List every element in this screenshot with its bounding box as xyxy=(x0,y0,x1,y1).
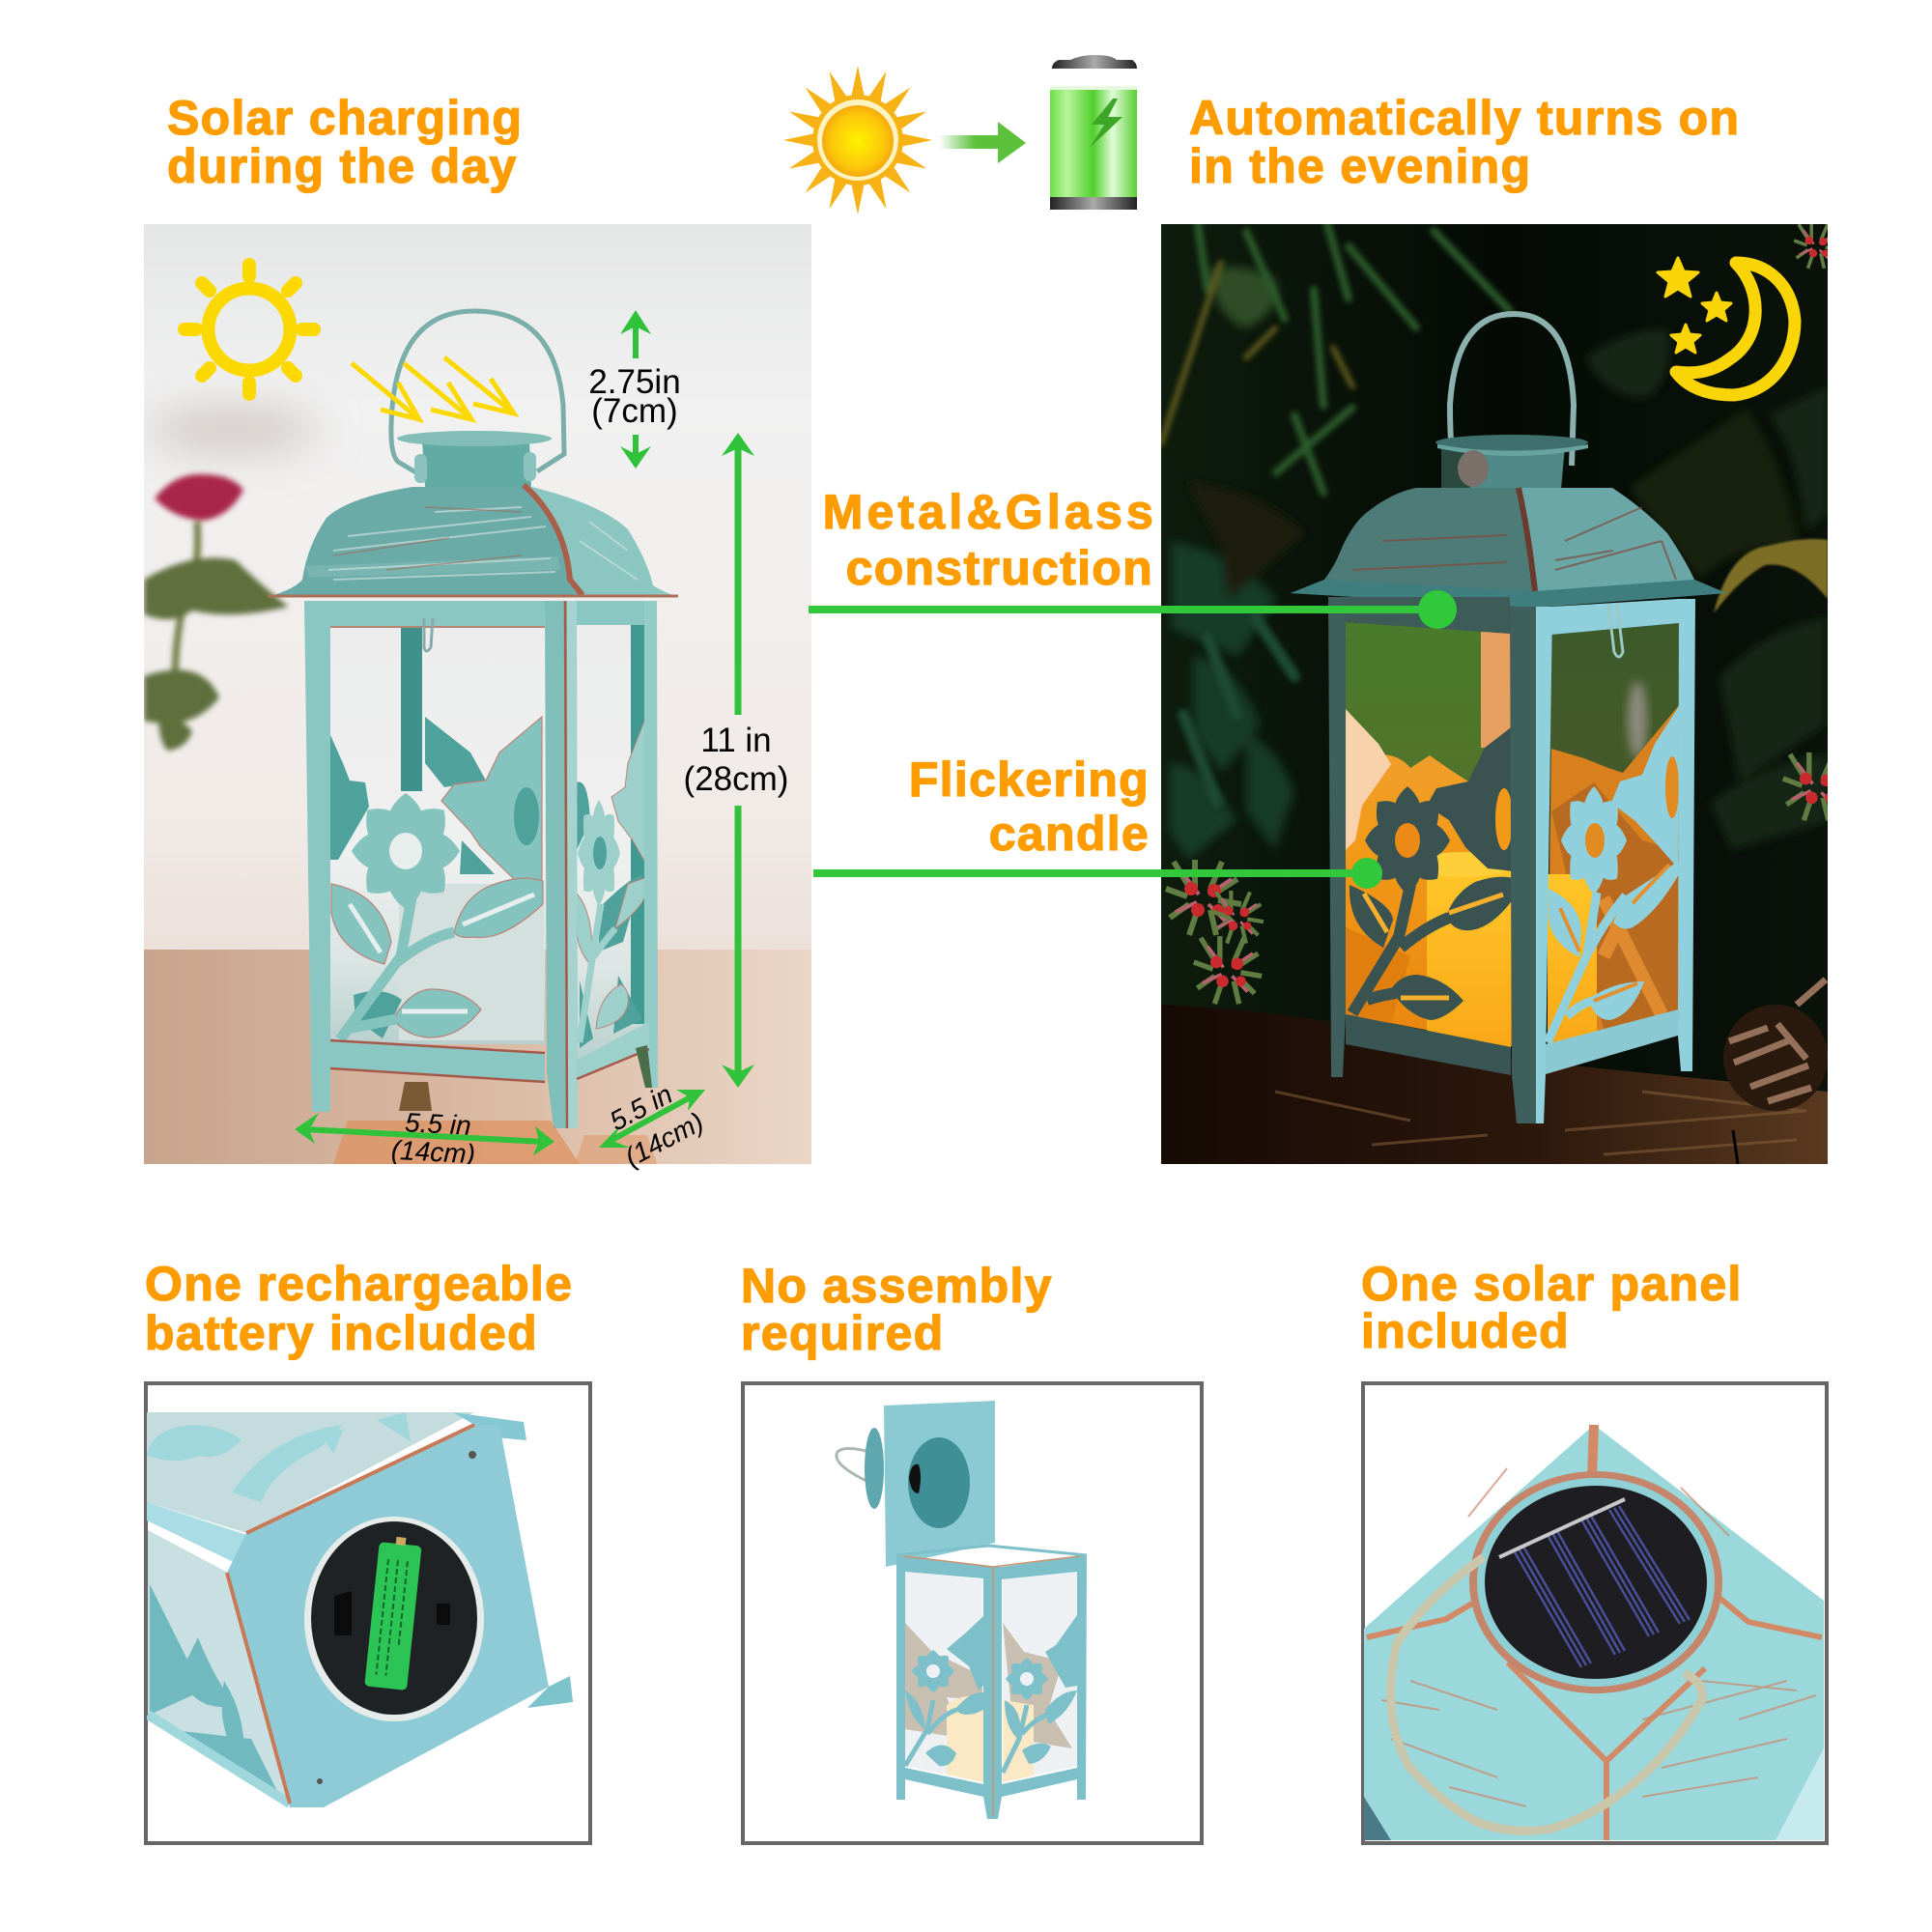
red flowers xyxy=(1166,223,1851,1004)
icon: small sun xyxy=(185,265,314,394)
heading: battery: One rechargeable xyxy=(145,1257,573,1311)
roof xyxy=(1291,488,1535,608)
handle behind lid xyxy=(837,1448,876,1481)
wood tabletop xyxy=(1161,1005,1828,1164)
wire handle xyxy=(1391,1557,1702,1831)
back bird silhouettes xyxy=(330,717,642,1048)
callout: metal and glass construction: construction xyxy=(846,541,1153,595)
dimension: width 5.5 in: (14cm) xyxy=(390,1135,476,1169)
front face decor xyxy=(331,717,543,1037)
dimension: handle height 2.75in xyxy=(588,310,681,469)
dimension: handle height 2.75in: (7cm) xyxy=(591,392,678,430)
panel: battery detail xyxy=(146,1383,590,1843)
dimension: lantern height 11 in xyxy=(684,433,788,1088)
candle xyxy=(399,884,544,1040)
back feet xyxy=(399,1082,432,1111)
battery xyxy=(364,1535,422,1690)
panel: daytime lantern photo xyxy=(144,224,811,1164)
handle xyxy=(391,311,564,474)
heading: no assembly xyxy=(741,1259,1053,1360)
solar disc xyxy=(1469,1471,1722,1693)
dimension: depth 5.5 in: 5.5 in xyxy=(605,1079,677,1136)
holder ring xyxy=(304,1517,484,1721)
rose, blurred xyxy=(144,474,289,751)
right face cutouts xyxy=(1548,706,1679,1020)
callout: metal and glass construction: Metal&Glass xyxy=(823,485,1157,539)
callout: flickering candle: candle xyxy=(989,807,1150,861)
panel: no assembly detail xyxy=(743,1383,1202,1843)
glass, front and side xyxy=(330,819,545,1044)
callout: metal and glass construction xyxy=(809,485,1457,629)
pine cone xyxy=(1723,980,1828,1111)
silhouettes xyxy=(905,1615,1077,1766)
heading: automatically turns on: Automatically turns on xyxy=(1189,91,1740,145)
orange leaf xyxy=(1714,539,1828,613)
base plate xyxy=(227,1425,549,1807)
dimension: handle height 2.75in: 2.75in xyxy=(588,363,681,401)
side face decor xyxy=(577,719,647,1029)
sun ray arrows xyxy=(352,357,514,419)
heading: battery xyxy=(145,1257,573,1360)
icon: charging battery xyxy=(1050,55,1137,210)
arrow: sun to battery xyxy=(939,122,1026,163)
neck and cap xyxy=(1441,446,1565,489)
foliage xyxy=(1169,268,1828,860)
dimension: width 5.5 in: 5.5 in xyxy=(404,1107,472,1141)
heading: no assembly: required xyxy=(741,1306,944,1360)
neck and cap xyxy=(422,440,531,487)
heading: battery: battery included xyxy=(145,1306,538,1360)
handle xyxy=(1450,314,1574,473)
latch xyxy=(424,618,433,651)
panel: night lantern photo xyxy=(1161,223,1851,1164)
panel: solar panel detail xyxy=(1363,1383,1827,1843)
icon: sun with orange rays xyxy=(783,66,932,214)
heading: solar charging during the day: during the day xyxy=(167,139,518,193)
frame bars xyxy=(304,601,658,1128)
back frame xyxy=(401,627,422,791)
heading: automatically turns on xyxy=(1189,91,1740,193)
heading: solar charging during the day: Solar charging xyxy=(167,91,523,145)
small lantern glass xyxy=(905,1572,982,1782)
lantern: night glowing xyxy=(1291,314,1726,1123)
heading: automatically turns on: in the evening xyxy=(1189,139,1531,193)
heading: no assembly: No assembly xyxy=(741,1259,1053,1313)
right window xyxy=(1548,623,1679,1044)
left window xyxy=(1346,622,1516,1047)
heading: solar charging during the day xyxy=(167,91,523,193)
lantern: daytime xyxy=(268,311,678,1128)
heading: solar panel xyxy=(1361,1257,1743,1358)
dimension: depth 5.5 in xyxy=(599,1079,708,1173)
floor reflection xyxy=(333,1121,580,1164)
dimension: depth 5.5 in: (14cm) xyxy=(620,1106,708,1173)
solar cells xyxy=(1514,1506,1690,1667)
frame bars xyxy=(1328,597,1695,1123)
roof xyxy=(268,487,582,597)
callout: flickering candle: Flickering xyxy=(909,753,1150,807)
glass top side xyxy=(147,1412,474,1533)
dimension: width 5.5 in xyxy=(295,1107,554,1169)
glass lower side xyxy=(148,1530,290,1804)
open lid xyxy=(884,1401,995,1567)
frame xyxy=(896,1555,1087,1819)
left face cutouts xyxy=(1350,724,1515,1020)
dimension: lantern height 11 in: (28cm) xyxy=(684,760,788,798)
callout: flickering candle xyxy=(813,753,1382,889)
icon: moon and stars xyxy=(1658,258,1795,395)
heading: solar panel: included xyxy=(1361,1304,1570,1358)
dimension: lantern height 11 in: 11 in xyxy=(700,722,772,759)
roof xyxy=(1364,1425,1824,1840)
heading: solar panel: One solar panel xyxy=(1361,1257,1743,1311)
